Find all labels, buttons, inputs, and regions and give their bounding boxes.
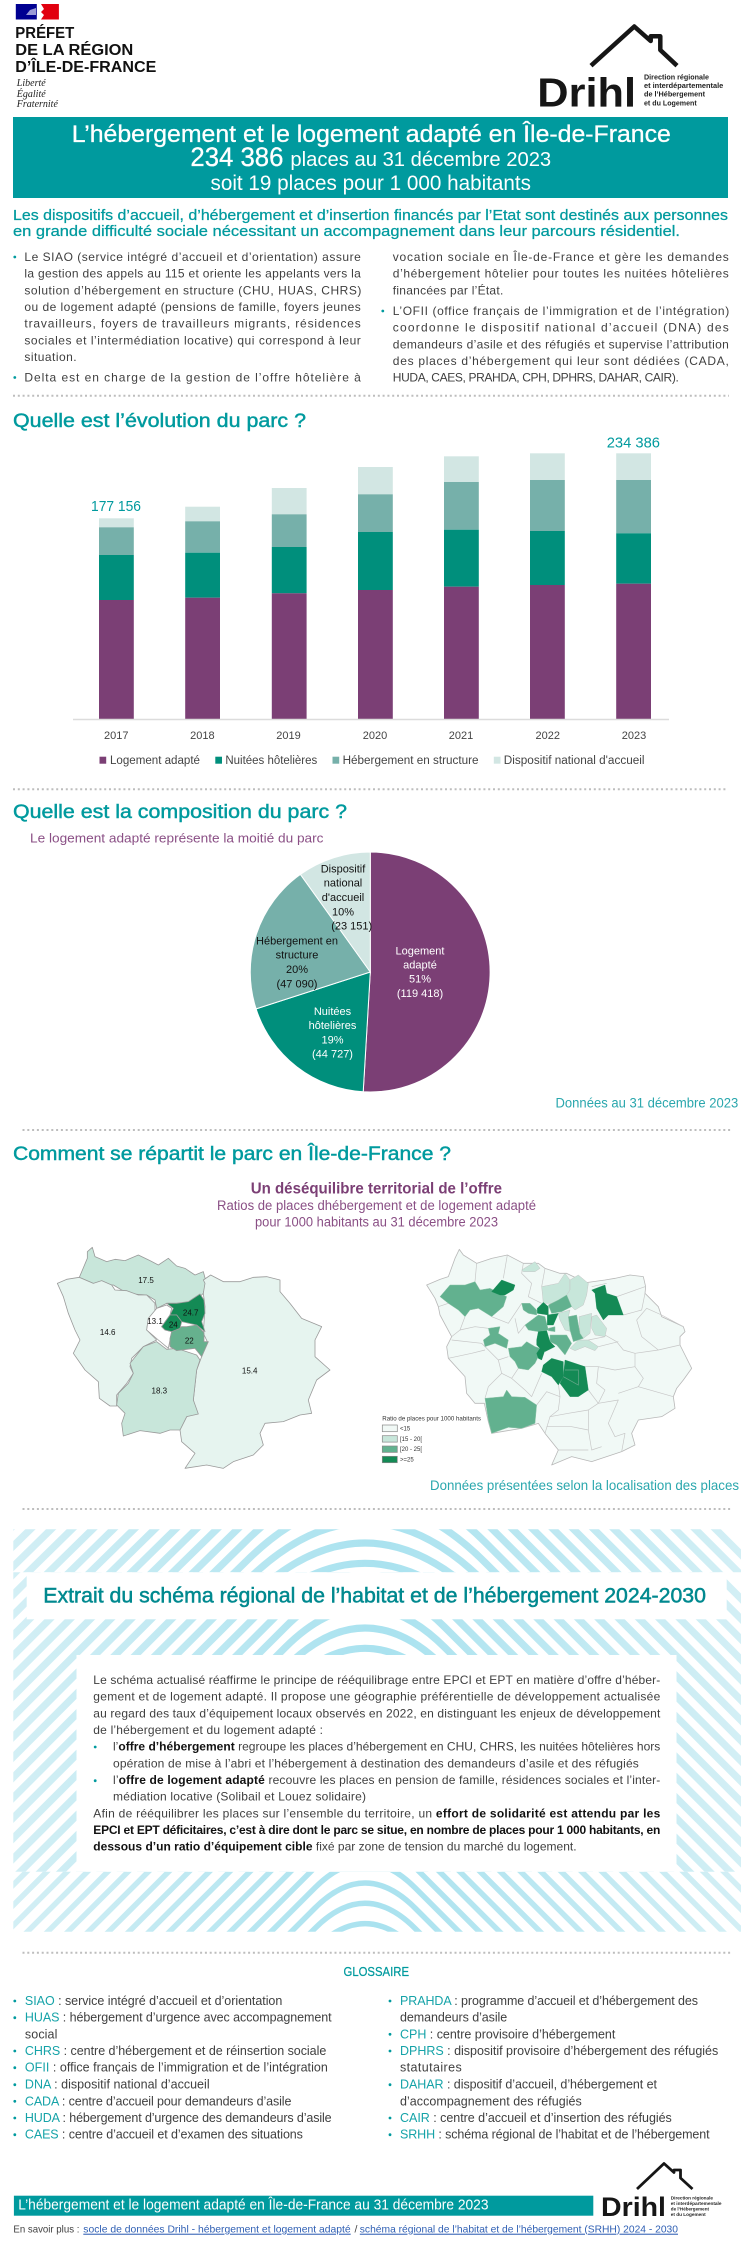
logo: Préfet de la région: PRÉFET bbox=[15, 23, 75, 42]
slice: dispositif national d'accueil: d'accueil bbox=[322, 892, 364, 904]
département: Val-d'Oise bbox=[79, 1247, 206, 1308]
bar 2017 bbox=[99, 518, 134, 719]
text block: left column: Le SIAO (service intégré d’accueil et d’orientation) assure bbox=[24, 250, 361, 264]
heading: évolution du parc: Quelle est l’évolution du parc ? bbox=[13, 410, 306, 432]
intro statement bbox=[13, 207, 728, 240]
glossary: right column: demandeurs d’asile bbox=[400, 2011, 507, 2025]
département: Seine-Saint-Denis bbox=[167, 1294, 205, 1332]
glossary: left column: HUDA : hébergement d’urgence des demandeurs d’asile bbox=[25, 2111, 332, 2125]
EPCI boundaries bbox=[438, 1255, 683, 1452]
footer banner: L’hébergement et le logement adapté en Île-de-France au 31 décembre 2023 bbox=[18, 2196, 488, 2214]
logo: Drihl small: et interdépartementale bbox=[671, 2201, 722, 2206]
slice: logement adapté: adapté bbox=[403, 960, 437, 972]
legend: map bbox=[382, 1417, 481, 1464]
panel: schéma régional bbox=[13, 1529, 741, 1932]
slice: dispositif national d'accueil: (23 151) bbox=[331, 920, 372, 932]
bar chart: evolution 2017-2023: 2023 bbox=[622, 730, 646, 742]
text block: right column: HUDA, CAES, PRAHDA, CPH, DPHRS, DAHAR, CAIR). bbox=[393, 371, 679, 385]
glossary: right column: DAHAR : dispositif d’accueil, d’hébergement et bbox=[400, 2078, 658, 2092]
logo: Préfet de la région: D’ÎLE-DE-FRANCE bbox=[15, 57, 157, 76]
background pattern: bottom band bbox=[13, 1872, 741, 1932]
logo: Drihl bbox=[537, 26, 723, 116]
icon: roof small bbox=[637, 2164, 692, 2189]
text block: left column: la gestion des appels au 115 et oriente les appelants vers la bbox=[24, 267, 361, 281]
glossary: right column: CPH : centre provisoire d’hébergement bbox=[400, 2027, 616, 2041]
bar 2021 bbox=[444, 456, 479, 719]
further reading links: / bbox=[354, 2224, 358, 2236]
département: Yvelines bbox=[57, 1277, 157, 1406]
logo: Préfet de la région: Égalité bbox=[16, 88, 46, 100]
slice: hébergement en structure: 20% bbox=[286, 964, 308, 976]
slice: hébergement en structure: structure bbox=[276, 950, 318, 962]
logo: Drihl: Drihl bbox=[537, 70, 636, 116]
map: départements: 13.1 bbox=[147, 1317, 163, 1326]
legend: bar chart: Hébergement en structure bbox=[343, 755, 478, 767]
text block: right column bbox=[381, 249, 729, 385]
legend: bar chart: Nuitées hôtelières bbox=[225, 755, 317, 767]
heading: répartition: Comment se répartit le parc en Île-de-France ? bbox=[13, 1142, 451, 1165]
text box: EPCI et EPT déficitaires, c’est à dire dont le parc se situe, en nombre de places pour 1 000 habitants, en bbox=[93, 1823, 660, 1837]
bar chart: evolution 2017-2023: 2020 bbox=[363, 730, 387, 742]
slice: logement adapté: Logement bbox=[396, 945, 444, 957]
text box bbox=[76, 1655, 676, 1872]
slice: nuitées hôtelières: (44 727) bbox=[312, 1049, 353, 1061]
bar 2022 bbox=[530, 453, 565, 719]
intro statement: Les dispositifs d’accueil, d’hébergement et d’insertion financés par l’Etat sont destinés aux personnes bbox=[13, 207, 728, 224]
title banner: places au 31 décembre 2023 bbox=[290, 149, 551, 171]
bar chart: evolution 2017-2023: 2017 bbox=[104, 730, 129, 742]
logo: Préfet de la région: Liberté bbox=[16, 78, 46, 89]
icon: French flag bbox=[16, 4, 59, 20]
text box: opération de mise à l’abri et l’hébergement à destination des demandeurs d’asile et des réfugiés bbox=[113, 1756, 639, 1770]
EPCI 20-25 bbox=[440, 1282, 583, 1433]
EPCI above 25 bbox=[492, 1280, 623, 1397]
logo: Drihl: Direction régionale bbox=[644, 74, 709, 82]
bar chart: evolution 2017-2023: 234 386 bbox=[607, 434, 660, 451]
map: départements: 24 bbox=[169, 1320, 178, 1330]
text block: left column bbox=[13, 250, 361, 385]
text box: Le schéma actualisé réaffirme le principe de rééquilibrage entre EPCI et EPT en matière d’offre d’héber- bbox=[93, 1673, 660, 1687]
pie chart: composition bbox=[250, 852, 490, 1092]
legend: bar chart: Logement adapté bbox=[110, 755, 200, 767]
text block: right column: des places d’hébergement qui leur sont dédiées (CADA, bbox=[393, 354, 729, 368]
map: départements: 22 bbox=[185, 1336, 194, 1346]
département: Hauts-de-Seine bbox=[147, 1305, 172, 1348]
bar 2018 bbox=[185, 507, 220, 719]
département: Seine-et-Marne bbox=[180, 1275, 330, 1468]
slice: logement adapté: 51% bbox=[409, 974, 431, 986]
text block: right column: financées par l’État. bbox=[393, 282, 503, 297]
legend: map: [15 - 20[ bbox=[400, 1437, 422, 1443]
slice: dispositif national d'accueil: Dispositif bbox=[321, 863, 366, 875]
bar chart: evolution 2017-2023 bbox=[73, 434, 669, 742]
text box: gement et de logement adapté. Il propose une géographie préférentielle de développement actualisée bbox=[93, 1690, 661, 1704]
further reading links: schéma régional de l’habitat et de l’hébergement (SRHH) 2024 - 2030 bbox=[360, 2224, 678, 2236]
text block: left column: travailleurs, foyers de travailleurs migrants, résidences bbox=[24, 317, 361, 331]
EPCI 15-20 bbox=[522, 1262, 607, 1351]
title banner: soit 19 places pour 1 000 habitants bbox=[210, 172, 531, 195]
legend: map: <15 bbox=[400, 1426, 411, 1432]
text box: de l’hébergement et du logement adapté : bbox=[93, 1723, 323, 1737]
bar chart: evolution 2017-2023: 2018 bbox=[190, 730, 215, 742]
map: départements: 17.5 bbox=[138, 1276, 154, 1285]
logo: Drihl small: de l’Hébergement bbox=[671, 2206, 710, 2212]
département: Paris bbox=[162, 1315, 182, 1332]
map: départements bbox=[57, 1247, 330, 1468]
text block: right column: d’hébergement hôtelier pour toutes les nuitées hôtelières bbox=[393, 267, 729, 281]
subheading: composition: Le logement adapté représente la moitié du parc bbox=[30, 831, 324, 846]
glossary: right column bbox=[389, 1994, 718, 2142]
logo: Drihl: de l’Hébergement bbox=[644, 92, 706, 99]
glossary: left column: CADA : centre d’accueil pour demandeurs d’asile bbox=[25, 2094, 291, 2108]
title box bbox=[27, 1572, 727, 1619]
bar 2020 bbox=[358, 467, 393, 719]
bar chart: evolution 2017-2023: 2019 bbox=[276, 730, 301, 742]
glossary: right column: PRAHDA : programme d’accueil et d’hébergement des bbox=[400, 1994, 698, 2008]
title banner bbox=[13, 117, 728, 198]
bar 2023 bbox=[616, 453, 651, 719]
legend: bar chart bbox=[100, 755, 644, 767]
bar chart: evolution 2017-2023: 177 156 bbox=[91, 498, 141, 515]
heading: glossaire: GLOSSAIRE bbox=[344, 1964, 409, 1979]
text block: right column: demandeurs d’asile et des réfugiés et supervise l’attribution bbox=[393, 337, 729, 351]
region outline bbox=[427, 1249, 692, 1465]
glossary: right column: SRHH : schéma régional de l’habitat et de l’hébergement bbox=[400, 2128, 710, 2142]
source note: données: Données au 31 décembre 2023 bbox=[556, 1095, 738, 1110]
legend: map: Ratio de places pour 1000 habitants bbox=[382, 1417, 481, 1423]
map: départements: 14.6 bbox=[100, 1328, 116, 1337]
text box: Afin de rééquilibrer les places sur l’ensemble du territoire, un effort de solidarité est attendu par les bbox=[93, 1806, 661, 1820]
glossary: left column: SIAO : service intégré d’accueil et d’orientation bbox=[25, 1994, 282, 2008]
slice: hébergement en structure: Hébergement en bbox=[256, 935, 338, 947]
text block: right column: coordonne le dispositif national d’accueil (DNA) des bbox=[393, 321, 729, 335]
intro statement: en grande difficulté sociale nécessitant un accompagnement dans leur parcours résidentiel. bbox=[13, 223, 680, 240]
slice: nuitées hôtelières: hôtelières bbox=[309, 1020, 357, 1032]
slice: hébergement en structure bbox=[250, 874, 370, 1009]
bar 2019 bbox=[272, 488, 307, 719]
title banner: 234 386 bbox=[190, 142, 283, 172]
glossary: left column: DNA : dispositif national d’accueil bbox=[25, 2078, 210, 2092]
text block: left column: solution d’hébergement en structure (CHU, HUAS, CHRS) bbox=[24, 283, 361, 297]
glossary: left column: social bbox=[25, 2027, 57, 2041]
slice: logement adapté bbox=[363, 852, 490, 1092]
slice: dispositif national d'accueil: 10% bbox=[332, 906, 354, 918]
glossary: right column: CAIR : centre d’accueil et d’insertion des réfugiés bbox=[400, 2111, 672, 2125]
logo: Drihl small: Drihl bbox=[601, 2192, 666, 2222]
text box: l’offre de logement adapté recouvre les places en pension de famille, résidences sociales et l’inter- bbox=[113, 1773, 660, 1787]
text box: médiation locative (Solibail et Louez solidaire) bbox=[113, 1790, 366, 1804]
slice: nuitées hôtelières: 19% bbox=[321, 1034, 344, 1046]
logo: Préfet de la région bbox=[15, 4, 157, 110]
logo: Préfet de la région: Fraternité bbox=[16, 99, 58, 110]
glossary: left column: HUAS : hébergement d’urgence avec accompagnement bbox=[25, 2011, 332, 2025]
further reading links: En savoir plus : bbox=[13, 2224, 79, 2236]
text block: left column: situation. bbox=[24, 350, 77, 364]
map: départements: 18.3 bbox=[152, 1386, 168, 1396]
text box: au regard des taux d’équipement locaux observés en 2022, en distinguant les enjeux de développement bbox=[93, 1706, 661, 1720]
map titles: Ratios de places dhébergement et de logement adapté bbox=[217, 1198, 536, 1213]
text block: left column: sociales et l’intermédiation locative) qui correspond à leur bbox=[24, 333, 361, 347]
legend: map: >=25 bbox=[400, 1458, 414, 1464]
title box: Extrait du schéma régional de l’habitat et de l’hébergement 2024-2030 bbox=[43, 1585, 706, 1608]
text block: right column: vocation sociale en Île-de-France et gère les demandes bbox=[393, 249, 729, 264]
glossary: left column: CAES : centre d’accueil et d’examen des situations bbox=[25, 2128, 303, 2142]
slice: logement adapté: (119 418) bbox=[397, 988, 443, 1000]
bar chart: evolution 2017-2023: 2022 bbox=[536, 730, 560, 742]
glossary: right column: statutaires bbox=[400, 2061, 462, 2075]
logo: Préfet de la région: DE LA RÉGION bbox=[15, 40, 133, 59]
logo: Drihl small: Direction régionale bbox=[671, 2196, 714, 2200]
map: départements: 15.4 bbox=[242, 1366, 258, 1376]
map titles: Un déséquilibre territorial de l’offre bbox=[251, 1180, 502, 1197]
map: départements: 24.7 bbox=[183, 1308, 199, 1318]
background pattern: top band bbox=[13, 1529, 741, 1572]
slice: nuitées hôtelières: Nuitées bbox=[314, 1006, 352, 1018]
text block: left column: ou de logement adapté (pensions de famille, foyers jeunes bbox=[24, 300, 361, 314]
further reading links bbox=[13, 2224, 678, 2236]
map: EPCI bbox=[427, 1249, 692, 1465]
logo: Drihl: et du Logement bbox=[644, 100, 697, 107]
glossary: right column: DPHRS : dispositif provisoire d’hébergement des réfugiés bbox=[400, 2044, 718, 2058]
slice: dispositif national d'accueil: national bbox=[324, 878, 362, 890]
map titles: pour 1000 habitants au 31 décembre 2023 bbox=[255, 1215, 498, 1230]
logo: Drihl: et interdépartementale bbox=[644, 83, 723, 90]
background pattern: middle band bbox=[13, 1572, 741, 1872]
logo: Drihl small bbox=[601, 2164, 722, 2222]
glossary: right column: d’accompagnement des réfugiés bbox=[400, 2094, 582, 2108]
logo: Drihl small: et du Logement bbox=[671, 2212, 706, 2217]
glossary: left column: CHRS : centre d’hébergement et de réinsertion sociale bbox=[25, 2044, 326, 2058]
map titles bbox=[217, 1180, 536, 1230]
slice: dispositif national d'accueil bbox=[300, 852, 372, 972]
text block: left column: Delta est en charge de la gestion de l’offre hôtelière à bbox=[24, 371, 361, 385]
glossary: left column bbox=[13, 1994, 332, 2142]
icon: roof bbox=[591, 26, 677, 66]
text block: right column: L’OFII (office français de l’immigration et de l’intégration) bbox=[393, 304, 729, 318]
glossary: left column: OFII : office français de l’immigration et de l’intégration bbox=[25, 2061, 328, 2075]
département: Val-de-Marne bbox=[170, 1325, 208, 1357]
source note: localisation: Données présentées selon la localisation des places bbox=[430, 1477, 739, 1493]
slice: nuitées hôtelières bbox=[256, 972, 370, 1092]
legend: bar chart: Dispositif national d'accueil bbox=[504, 755, 644, 767]
legend: map: [20 - 25[ bbox=[400, 1447, 422, 1453]
title banner: L’hébergement et le logement adapté en Île-de-France bbox=[72, 121, 671, 148]
further reading links: socle de données Drihl - hébergement et logement adapté bbox=[83, 2224, 351, 2236]
text box: l’offre d’hébergement regroupe les places d’hébergement en CHU, CHRS, les nuitées hôtelières hors bbox=[113, 1740, 660, 1754]
slice: hébergement en structure: (47 090) bbox=[277, 978, 317, 990]
bar chart: evolution 2017-2023: 2021 bbox=[449, 730, 473, 742]
heading: composition du parc: Quelle est la composition du parc ? bbox=[13, 801, 347, 823]
département: Essonne bbox=[117, 1342, 200, 1436]
text box: dessous d’un ratio d’équipement cible fixé par zone de tension du marché du logement. bbox=[93, 1840, 577, 1854]
